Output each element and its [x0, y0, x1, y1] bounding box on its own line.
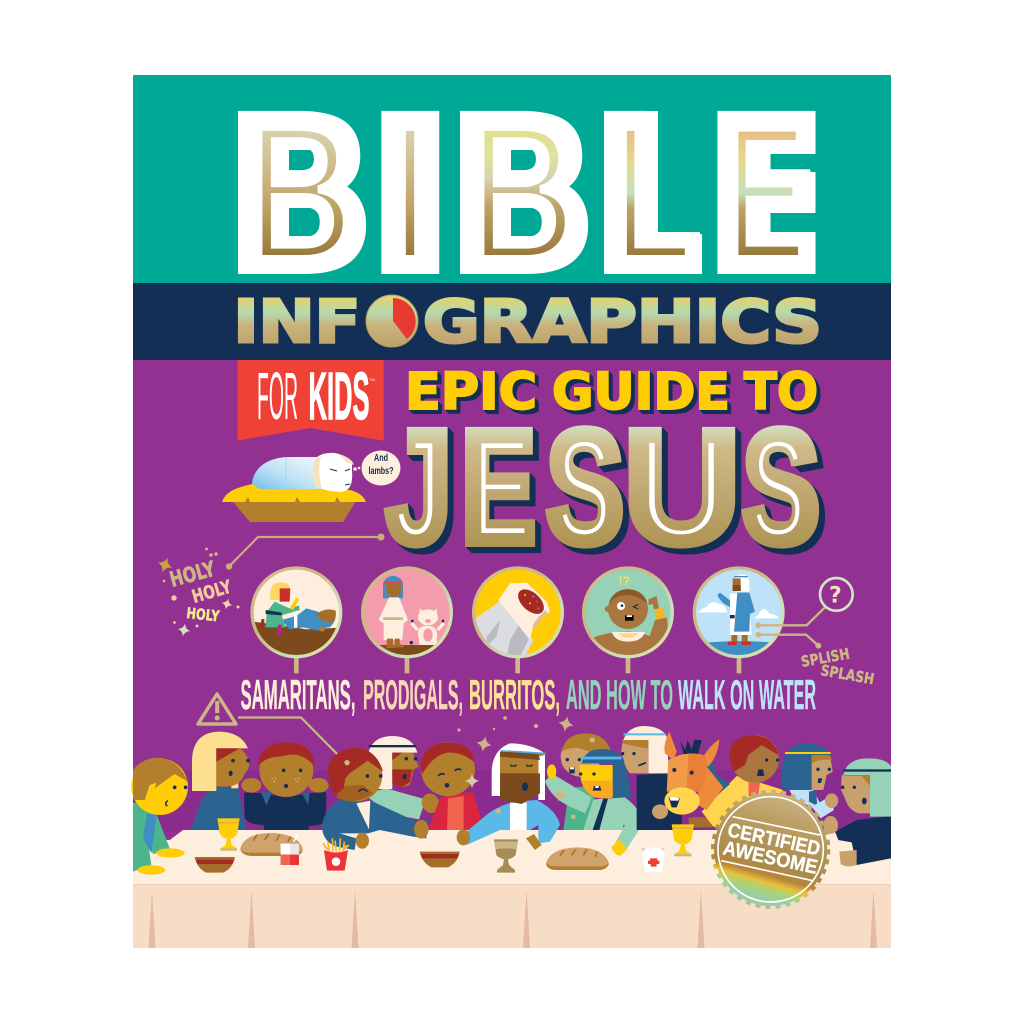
title: INFOGRAPHICS: O [372, 288, 412, 356]
juice box [281, 834, 299, 865]
bread loaf [240, 833, 303, 856]
title: INFOGRAPHICS [234, 288, 822, 356]
title: BIBLE: B [447, 74, 597, 319]
heading: JESUS: S [557, 411, 611, 566]
seal: certified awesome: CERTIFIED [726, 819, 822, 860]
bread, chalice and takeout box on right of table [546, 824, 694, 872]
title: BIBLE: B [225, 74, 375, 319]
circle: good Samaritan [250, 567, 346, 673]
circle: burrito on a mountain [472, 567, 565, 673]
title: BIBLE [225, 74, 824, 319]
circle: walking on water [693, 567, 787, 673]
goblet, bread, juice box, fries and bowls on the table [195, 818, 518, 873]
gold chalice [672, 824, 694, 856]
apostle: mint hood, far right [823, 758, 891, 866]
apostle: worried in front [322, 748, 429, 850]
callouts: question mark and splish splash [755, 578, 853, 649]
heading: JESUS: U [624, 397, 740, 576]
Jesus [457, 743, 560, 850]
SPLASH text: SPLASH [819, 661, 876, 688]
apostle: behind, brown hair [561, 733, 612, 830]
takeout box [641, 847, 665, 872]
callouts: question mark and splish splash: ? [829, 583, 842, 608]
subtitle: BURRITOS, [469, 671, 560, 718]
title: INFOGRAPHICS: GRAPHICS [423, 288, 822, 356]
title: BIBLE: I [365, 74, 456, 319]
seal: certified awesome [713, 792, 828, 907]
bowl [195, 857, 235, 873]
title: BIBLE: L [612, 85, 693, 300]
gold chalice [217, 818, 240, 851]
apostle: white headdress, navy robe [621, 726, 682, 830]
ribbon: FOR KIDS: TM [369, 377, 375, 382]
HOLY HOLY HOLY text and stars: HOLY [186, 604, 221, 626]
heading: JESUS: S [751, 411, 805, 566]
title: BIBLE: L [593, 74, 703, 319]
heading: EPIC GUIDE TO: EPIC [405, 362, 537, 421]
heading: JESUS [386, 397, 820, 576]
warning icon and connector [198, 694, 346, 763]
dark goblet [494, 839, 518, 873]
apostle: yellow face, mint robe [545, 749, 643, 856]
heading: EPIC GUIDE TO [405, 362, 818, 421]
ribbon: FOR KIDS: FOR [257, 359, 298, 434]
thought bubble: And [374, 453, 388, 464]
thought bubble: lambs? [368, 466, 394, 477]
title: INFOGRAPHICS: INF [234, 288, 360, 356]
subtitle: AND HOW TO [566, 671, 673, 718]
apostle: red hair, yellow robe [688, 735, 783, 830]
left boy [131, 758, 188, 875]
apostle: red robe [420, 742, 481, 830]
heading: EPIC GUIDE TO: TO [744, 362, 818, 421]
apostle: blue hood [782, 743, 838, 818]
book cover background [133, 75, 891, 840]
heading: JESUS: J [386, 397, 452, 576]
fries [323, 838, 349, 871]
HOLY HOLY HOLY text and stars [155, 548, 240, 638]
heading: JESUS: U [636, 408, 726, 566]
stars around the table [457, 715, 575, 753]
icon: lamb in manger [222, 450, 400, 522]
text: KIDS [308, 359, 370, 434]
heading: JESUS: S [546, 397, 624, 576]
SPLISH text: SPLISH [800, 645, 851, 671]
circle: healed blind man: !? [619, 574, 630, 588]
table and tablecloth [133, 830, 891, 948]
circle: prodigal son and pig [360, 567, 456, 673]
title: BIBLE: B [468, 85, 577, 300]
subtitle: SAMARITANS, [240, 671, 356, 718]
bread loaf [546, 847, 609, 870]
apostle: navy robe arms raised [241, 742, 329, 830]
title: BIBLE: B [246, 85, 355, 300]
circle: healed blind man [582, 567, 675, 673]
apostle: blonde [191, 732, 250, 830]
bowl [420, 852, 460, 867]
title: BIBLE: E [727, 88, 805, 298]
HOLY HOLY HOLY text and stars: HOLY [190, 576, 235, 608]
subtitle: PRODIGALS, [363, 671, 463, 718]
apostle: headdress with red beard [366, 736, 443, 819]
heading: JESUS: E [472, 411, 530, 566]
thought bubble [362, 450, 400, 486]
connector line to JESUS [226, 534, 384, 570]
heading: EPIC GUIDE TO: GUIDE [552, 362, 730, 421]
title: BIBLE: I [388, 85, 432, 300]
title: BIBLE: E [706, 74, 824, 319]
heading: JESUS: S [742, 397, 820, 576]
seal: certified awesome: AWESOME [721, 837, 819, 879]
HOLY HOLY HOLY text and stars: HOLY [167, 557, 218, 592]
heading: JESUS: J [395, 411, 441, 566]
heading: JESUS: E [461, 397, 536, 576]
subtitle [240, 671, 816, 718]
donkey [664, 732, 730, 815]
